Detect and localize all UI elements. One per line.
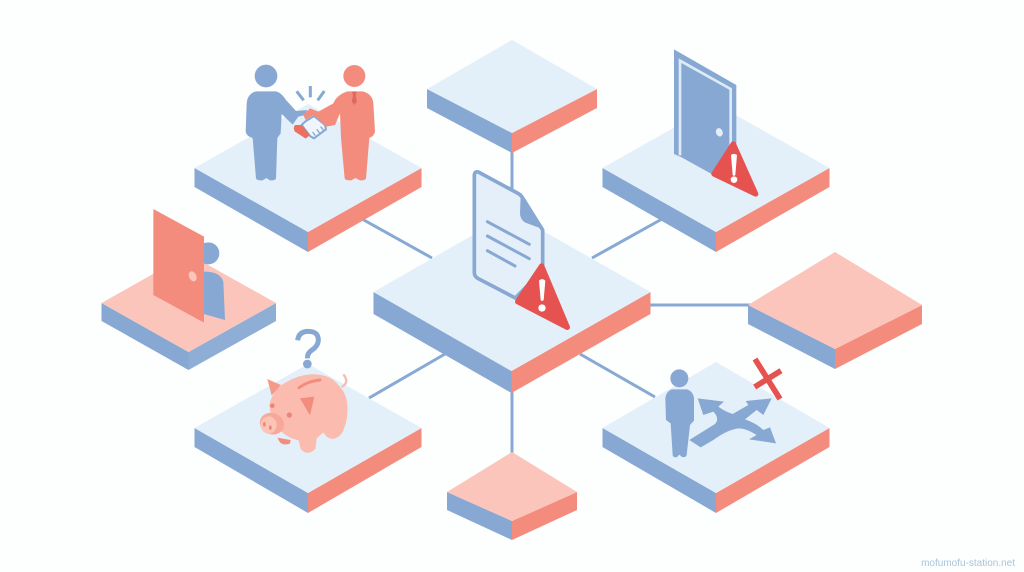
icon: handshake between two people [246,65,375,180]
warning triangle [518,266,567,327]
blue person [246,65,307,180]
warning triangle [714,144,756,194]
platform: top center [427,40,597,153]
platform: left pink [102,254,276,370]
icon: person at crossroads [665,359,781,457]
text lines [487,222,529,266]
icon: document with warning [474,172,567,327]
coral door [153,209,204,323]
platform: center [374,213,650,393]
spark marks [297,86,324,100]
clasped white hand [302,116,326,138]
coin slot [299,380,320,388]
tie [352,92,357,105]
red person [303,65,375,180]
door [674,49,736,174]
icon: person hiding behind door [153,209,225,323]
tail [342,374,346,387]
platform: right pink [748,252,922,369]
hand finger marks [313,127,323,136]
hidden person [197,242,225,320]
platform: bottom center [447,452,577,540]
platform: top left [194,104,422,252]
door knob [187,270,198,283]
snout [257,409,287,438]
platform: bottom right [602,362,830,513]
red cross [755,359,781,399]
door knob [715,127,724,138]
person [665,369,694,457]
far leg [277,438,291,444]
red cuff [294,125,310,139]
eyes [270,403,275,408]
question mark [298,331,318,368]
platform: top right [602,104,830,252]
document sheet [474,172,543,298]
folded corner [520,195,543,229]
icon: door with warning [674,49,756,194]
ears [267,379,281,396]
connector lines [362,145,755,460]
branching arrows [689,398,776,447]
platform: bottom left [194,364,422,513]
watermark: mofumofu-station.net [921,558,1015,569]
icon: piggy bank with question mark [257,331,348,453]
pig body [269,374,348,453]
